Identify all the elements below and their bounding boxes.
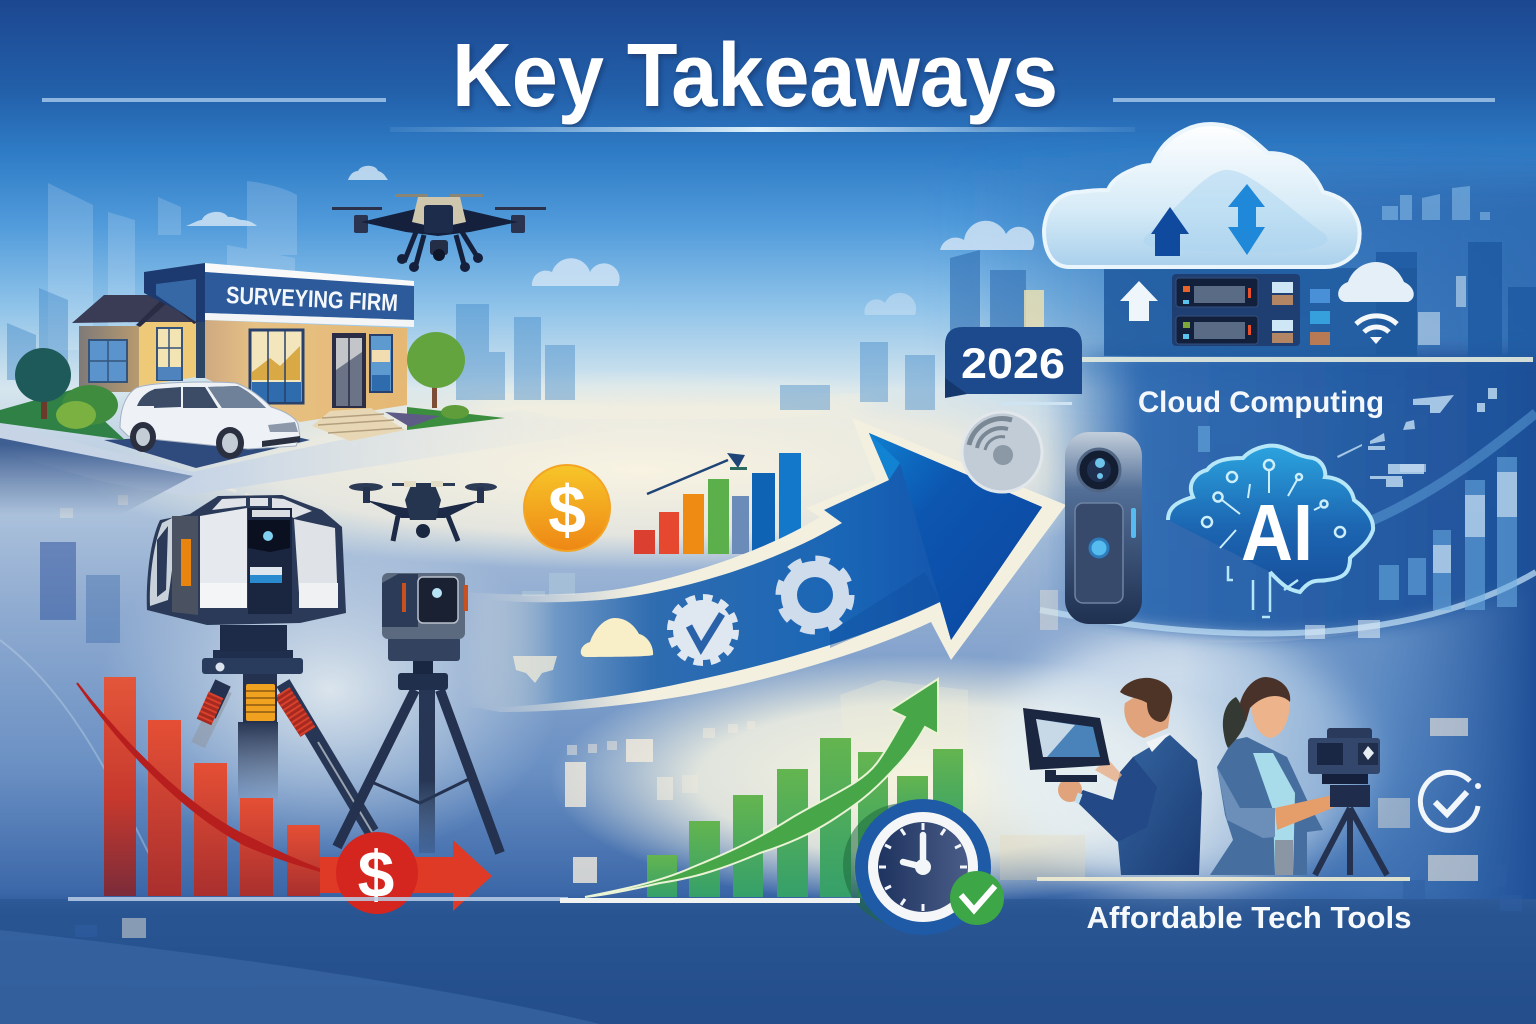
data highlights right [1305,464,1517,639]
icon: cloud on arrow [581,618,653,657]
icon: small cloud [1338,262,1414,302]
server backdrop [1104,268,1417,356]
lawn [0,390,125,440]
person: man with tablet [1023,678,1202,875]
2026 label: 2026 [961,340,1065,388]
trees [41,395,47,419]
road [0,410,620,495]
second camera on tripod [337,573,500,853]
icon: tablet [1023,708,1110,770]
icon: top drone [332,194,546,272]
icon: check gear on arrow [672,599,734,661]
person: woman with camera [1210,677,1335,875]
icon: cloud [1044,124,1360,267]
icon: red dollar coin [336,832,418,914]
icon: wifi [1356,316,1397,332]
icon: pale shield on arrow tail [513,656,557,683]
big arrow [460,418,1066,712]
label: AI: AI [1241,488,1313,577]
scanner body [147,495,346,625]
survey scanner on tripod [147,495,372,832]
icon: camera device [1065,432,1142,624]
mini bar chart [634,453,801,554]
icon: gold dollar coin: $ [548,472,586,548]
building sign: SURVEYING FIRM [225,282,399,317]
title rules [42,98,1495,132]
icon: gold dollar coin [524,465,610,551]
people group [1023,677,1481,935]
camera on small tripod [1308,728,1387,875]
cloud computing group [1044,124,1533,419]
icon: clock with check [855,799,1004,935]
steps [312,408,405,441]
trend curve [77,683,338,876]
2026 label [945,327,1082,405]
falling red bar chart [77,677,492,914]
icon: car [120,382,300,459]
data columns right [1198,426,1517,610]
icon: gear on arrow [780,560,850,630]
server rack [1172,274,1330,346]
icon: sensor disc [962,412,1042,492]
icon: check circle [1420,772,1481,830]
city skyline left [7,181,935,410]
baseline [68,897,860,903]
icon: red arrow [320,840,492,911]
city skyline right [950,186,1536,360]
icon: AI brain [1168,446,1373,617]
surveying firm building [0,263,620,515]
label: affordable tech tools: Affordable Tech Tools [1086,900,1412,935]
falling red bar chart: $ [358,837,394,911]
house [79,326,139,392]
icon: up arrow [1151,207,1189,256]
motion streaks [1337,388,1497,487]
office [144,263,205,331]
icon: small drone [349,481,497,541]
label: cloud computing: Cloud Computing [1138,386,1384,419]
small clouds [186,166,1034,315]
rising green bar chart [585,679,967,927]
icon: up down arrow [1228,184,1265,255]
title: Key Takeaways [452,26,1058,126]
pixel squares decoration [60,495,1478,938]
icon: white up arrow [1120,281,1158,321]
